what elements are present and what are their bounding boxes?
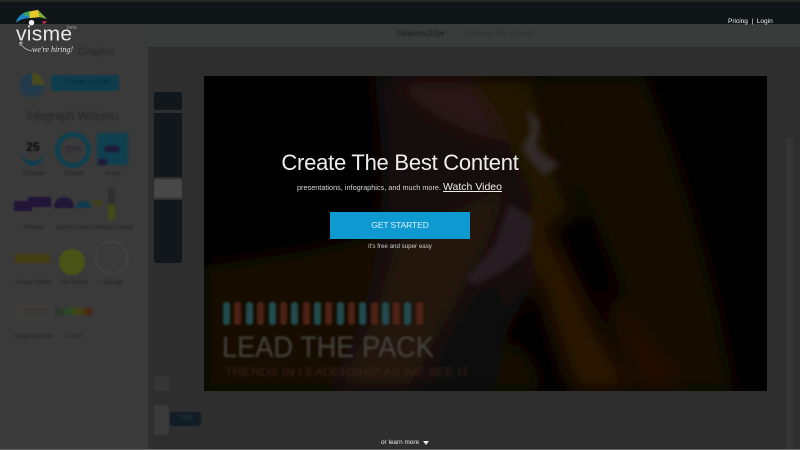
preview people icons [223,302,423,325]
widget labels: Linear Meter [16,279,52,286]
widget: vertical linear [94,200,102,206]
hero subheading: presentations, infographics, and much more. Watch Video [297,181,502,193]
logo [16,10,77,54]
widget: gauge [95,241,128,274]
widget: ribbon top [28,197,51,207]
widget: vertical bar [108,188,115,220]
widget labels: Radial [65,170,83,177]
widget labels: Segment line [15,333,53,340]
preview subtitle: TRENDS IN LEADERSHIP AS WE SEE IT [225,365,470,379]
zoom tooltip: 75% [178,415,192,422]
down arrow icon [423,441,429,445]
widget labels: Gauge [103,279,123,286]
widget: array [97,133,128,165]
widget: likert [56,308,92,315]
free note: it's free and super easy [368,243,432,250]
secondary toolbar [0,24,800,47]
nav links: Pricing | Login [728,18,773,25]
widget: radial [55,132,91,168]
home button [154,376,169,391]
secondary toolbar: Objects(11)▾ [397,29,444,38]
get started button: GET STARTED [371,220,429,230]
pale rock highlights [466,108,560,286]
active tool [154,179,182,198]
bottom edge [0,449,800,450]
widget: segment line [18,306,52,318]
widget: linear meter [15,254,50,263]
logo mark: colourful eye [16,10,47,26]
widget: radial: 20% [65,145,81,154]
tool button [154,92,182,110]
widget labels: Likert [66,333,82,340]
learn more link: or learn more [381,439,419,446]
widget labels: Ribbon [24,224,44,231]
zoom tooltip [170,412,201,426]
widget labels: Counter [22,170,46,177]
zoom control [154,405,169,435]
create chart button: + Create a Chart [59,79,111,86]
hiring arrow [20,42,32,52]
widget labels: Pie meter [60,279,88,286]
vertical tool strip [154,92,182,263]
sidebar heading: graphs: Graphs [78,46,114,58]
lower tool group [154,200,182,263]
widget: counter [21,142,45,166]
canvas preview image [204,76,767,391]
preview title: LEAD THE PACK [222,331,434,364]
hero heading: Create The Best Content [281,150,519,175]
secondary toolbar: Animate this object [464,29,532,38]
hiring note: we're hiring! [32,45,73,54]
widget labels: Semi circles [56,224,92,231]
widget labels [16,171,132,339]
widget: semi circles [54,197,74,208]
logo wordmark: visme [16,24,72,45]
widget labels: Array [105,170,121,177]
widget: counter: 25 [26,140,40,154]
widget: pie meter [59,249,85,275]
widget: ribbon [14,201,32,211]
beta tag: beta [67,25,77,31]
left sidebar panel [0,47,148,449]
create chart pie icon [20,73,44,97]
tool group [154,113,182,177]
top toolbar [0,0,800,24]
sidebar heading: infograph widgets: Infograph Widgets [26,111,119,123]
widget: semi circle small [76,201,91,208]
canyon rock texture [204,76,734,391]
get started button [330,212,470,239]
right scrollbar [786,138,793,450]
create chart button [51,75,119,91]
widget labels: Vertical Linear [92,224,134,231]
